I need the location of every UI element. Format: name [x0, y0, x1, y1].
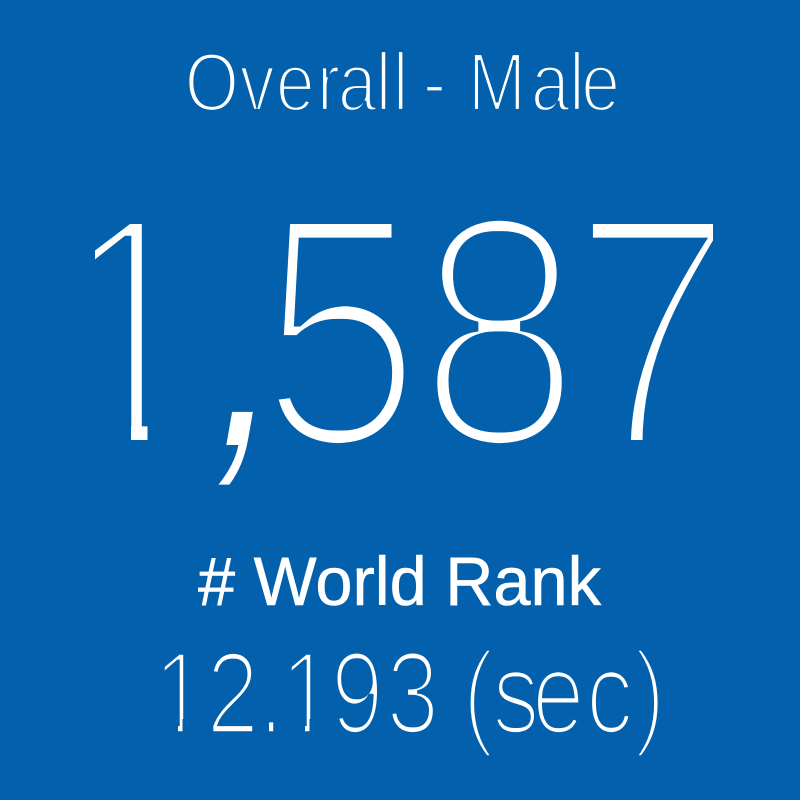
big number: rank: 1	[48, 147, 215, 516]
time value: 12.193 (sec)	[153, 629, 666, 758]
big number: rank: ,	[210, 164, 289, 511]
big number: rank	[48, 147, 736, 516]
label: world rank: # World Rank	[198, 543, 601, 620]
title: Overall - Male	[185, 37, 620, 129]
big number: rank: 5	[258, 147, 424, 516]
big number: rank: 8	[416, 147, 583, 516]
big number: rank: 7	[570, 147, 736, 516]
